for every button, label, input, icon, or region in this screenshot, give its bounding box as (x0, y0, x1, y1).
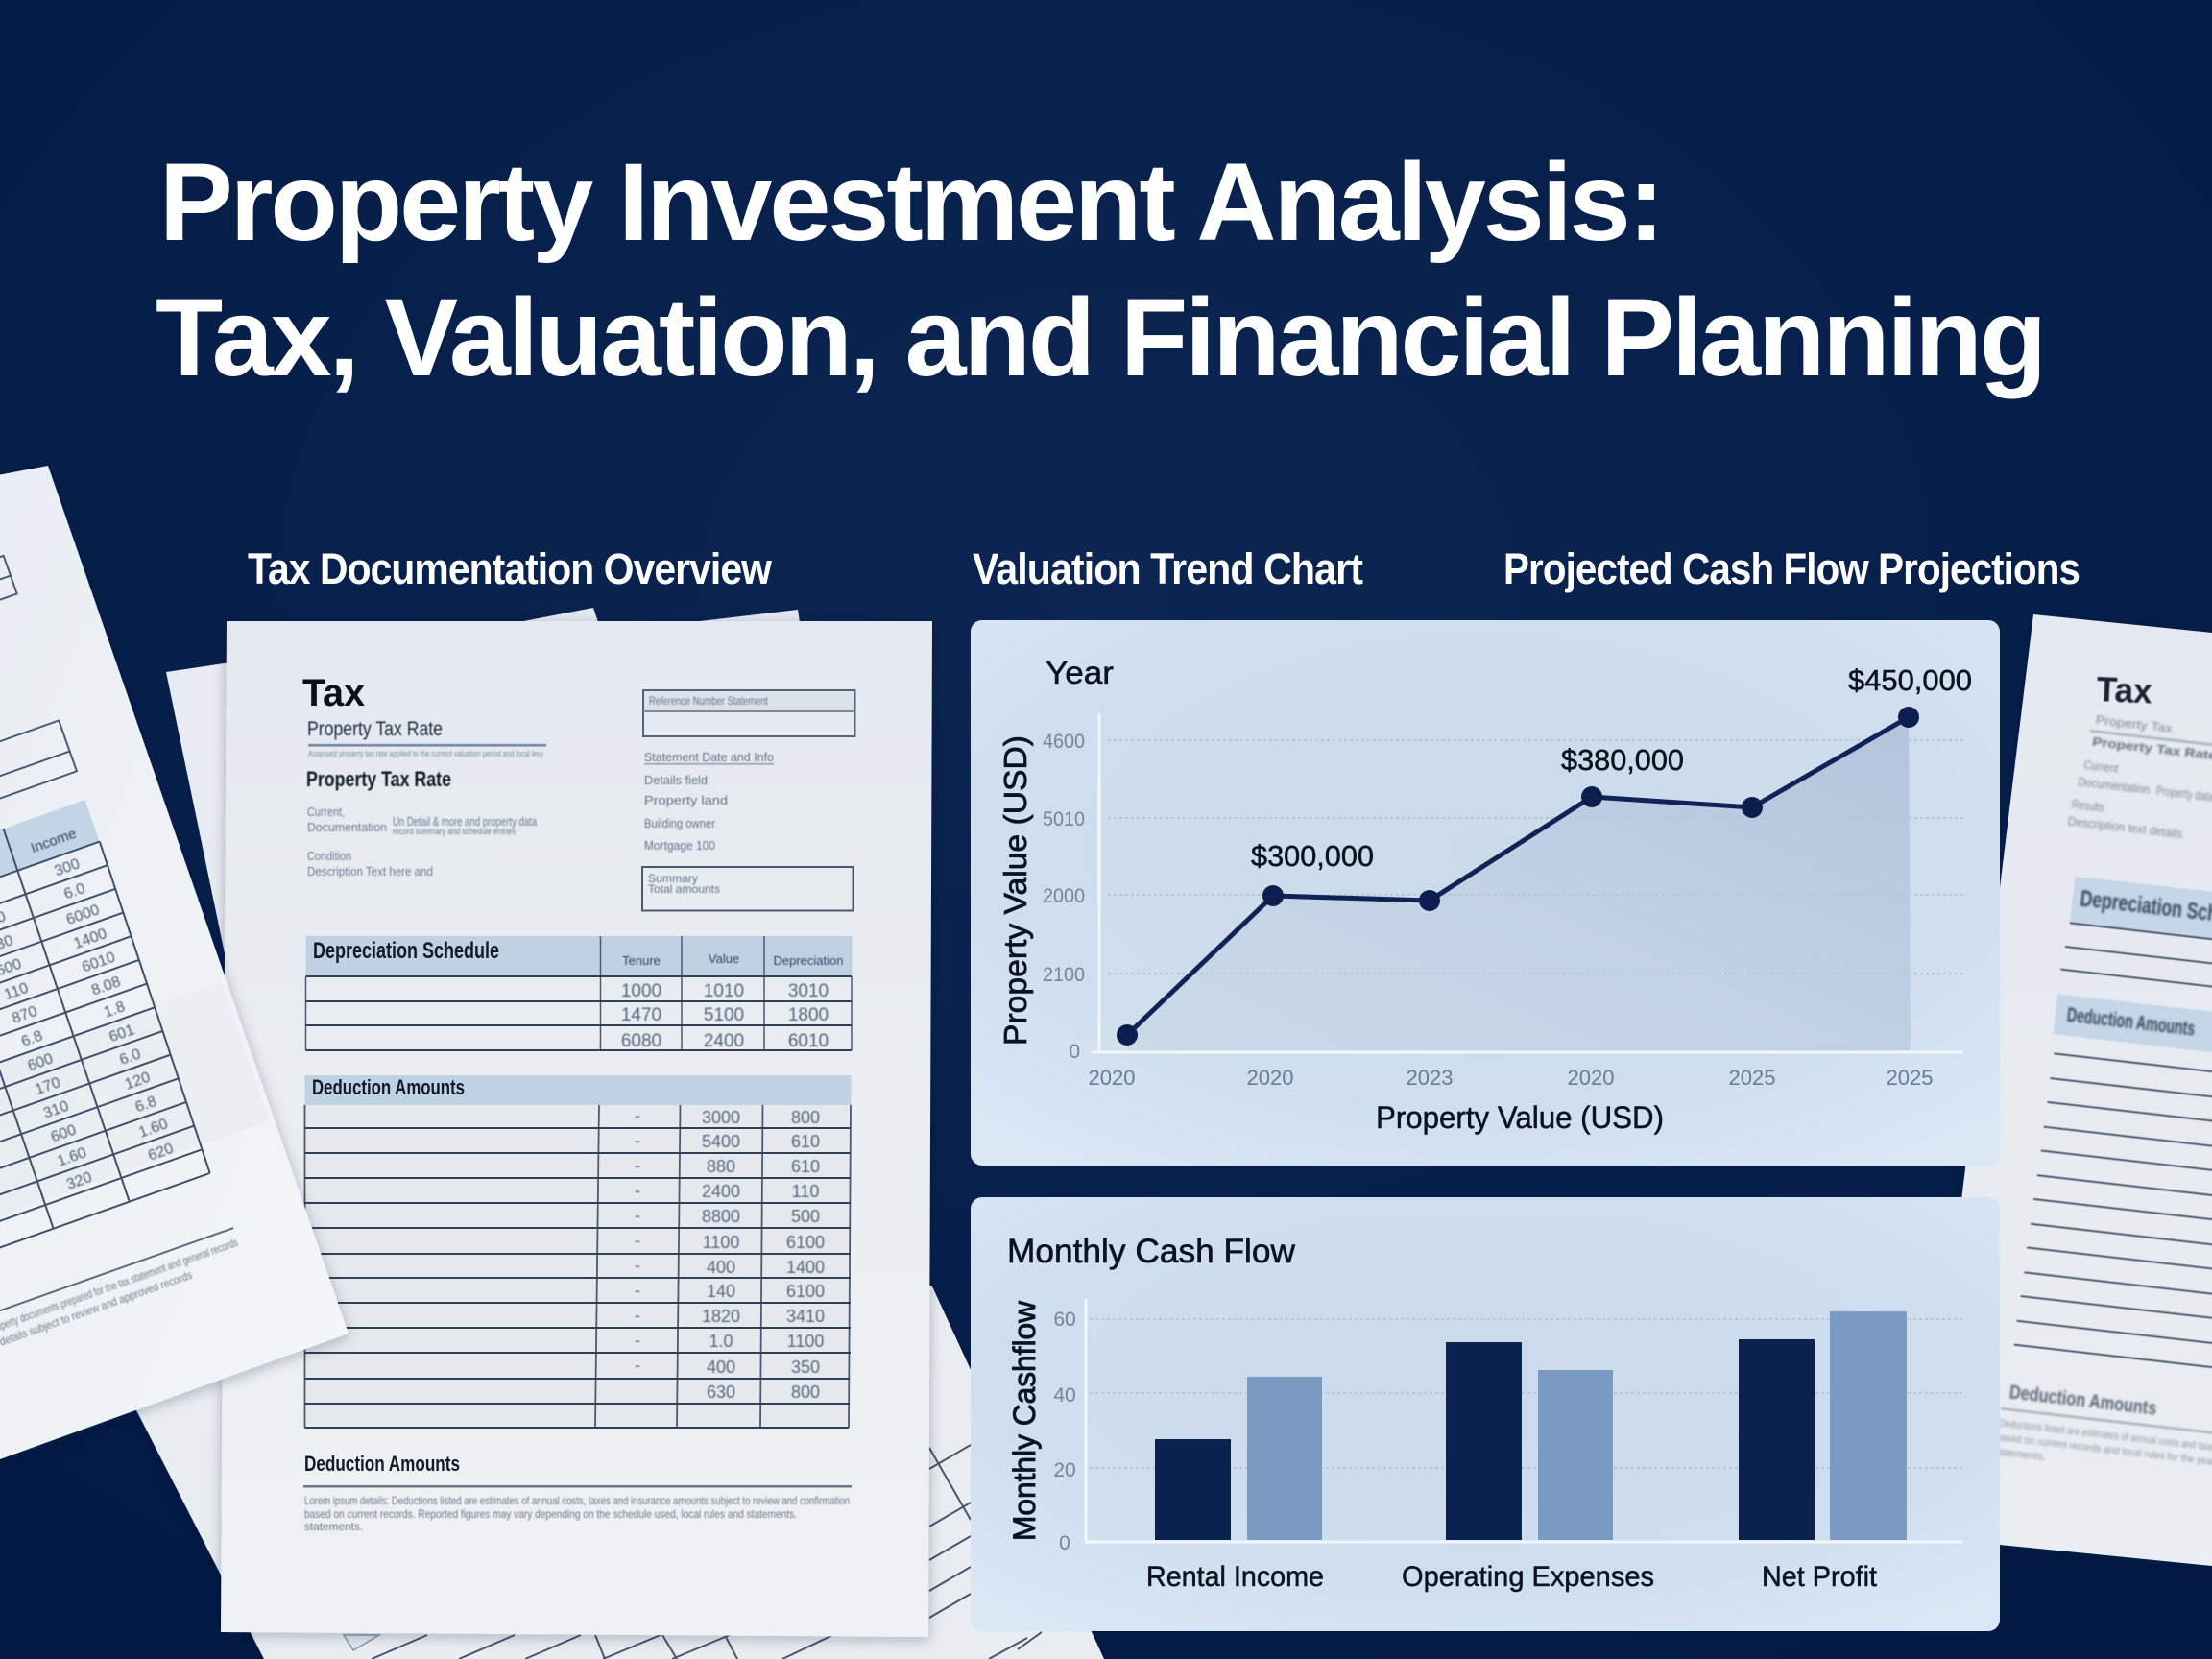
table: deduction amounts: - (635, 1131, 640, 1150)
table: deduction amounts: - (635, 1256, 640, 1275)
table: deduction amounts: 6100 (786, 1233, 825, 1252)
table: deduction amounts: - (635, 1356, 640, 1375)
right column details: Property land (644, 793, 728, 807)
y axis ticks: 0 (1069, 1041, 1080, 1063)
small text block: Property Tax (2095, 712, 2174, 735)
y axis ticks: 2000 (1043, 885, 1085, 907)
table: depreciation schedule: 6010 (788, 1031, 829, 1051)
table: deduction amounts: 6100 (786, 1282, 825, 1301)
table: deduction amounts: - (635, 1156, 640, 1175)
table: deduction amounts: Deduction Amounts (312, 1075, 465, 1099)
axes (1092, 713, 1963, 1052)
table: depreciation schedule: 2400 (704, 1031, 744, 1051)
category labels: Operating Expenses (1402, 1561, 1654, 1593)
right column details (644, 750, 774, 853)
small text block: Current (2083, 757, 2120, 776)
property tax rate text block: record summary and schedule entries (393, 827, 516, 836)
property tax rate text block: Current, (307, 805, 345, 819)
table values: 1400 (72, 926, 109, 952)
table: deduction amounts: 880 (707, 1157, 735, 1176)
title: Property Investment Analysis: (159, 141, 1662, 264)
right column details: Statement Date and Info (644, 750, 774, 764)
table: deduction amounts: 1100 (703, 1233, 739, 1252)
property tax rate text block: Un Detail & more and property data (393, 814, 538, 829)
table values: 120 (123, 1070, 153, 1094)
section headings (248, 544, 2080, 593)
property tax rate text block: Documentation (307, 820, 387, 834)
table: deduction amounts: 350 (791, 1358, 820, 1377)
x axis ticks: 2020 (1089, 1066, 1135, 1090)
footer: deduction amounts note (303, 1452, 852, 1533)
table: deduction amounts: 1.0 (709, 1332, 733, 1351)
small text block: Description text details (2067, 813, 2183, 841)
grid lines (1108, 740, 1963, 974)
table: deduction amounts: 1100 (787, 1332, 824, 1351)
x axis ticks (1089, 1066, 1933, 1090)
paper sheet (0, 466, 349, 1459)
table values: 6.0 (61, 880, 87, 902)
table values: 6.8 (133, 1094, 158, 1116)
panel background (971, 620, 2000, 1166)
y axis ticks: 60 (1053, 1309, 1076, 1331)
table values: 6.0 (117, 1046, 143, 1069)
table values: 6000 (64, 902, 102, 928)
table values: 1.60 (136, 1116, 170, 1142)
y axis ticks: 5010 (1043, 808, 1085, 830)
category labels: Net Profit (1762, 1561, 1878, 1593)
lower right form box: Summary (648, 872, 698, 885)
top right form box (643, 690, 854, 736)
chart title: Monthly Cash Flow (1007, 1233, 1296, 1270)
y axis ticks: 2100 (1043, 964, 1085, 986)
table: deduction amounts: - (635, 1306, 640, 1325)
table: deduction amounts: - (635, 1181, 640, 1200)
table values: 170 (33, 1074, 62, 1098)
table: depreciation schedule: 1470 (621, 1005, 661, 1025)
heading: Tax: Tax (2096, 669, 2153, 710)
property tax rate text block (306, 767, 538, 878)
table: deduction amounts: 140 (707, 1282, 735, 1301)
footer note: Deduction Amounts (2008, 1382, 2157, 1420)
right column details: Details field (644, 773, 708, 787)
table values: 870 (10, 1003, 39, 1027)
table values: 6.8 (19, 1028, 45, 1050)
y axis ticks (1053, 1309, 1076, 1554)
data points (1117, 707, 1919, 1046)
bottom back sheet of paper (96, 1104, 1104, 1659)
table: depreciation schedule: 5100 (704, 1005, 744, 1025)
footer: deduction amounts note: statements. (304, 1520, 363, 1533)
bars: operating expenses (1446, 1342, 1613, 1540)
footer: deduction amounts note: Lorem ipsum details: Deductions listed are estimates of annual costs, taxes and insurance amounts subject to review and confirmation (304, 1494, 850, 1507)
y axis title: Monthly Cashflow (1007, 1300, 1042, 1541)
y axis ticks (1043, 731, 1085, 1063)
table: deduction amounts: 500 (791, 1207, 820, 1226)
table: deduction amounts: 800 (791, 1108, 820, 1127)
table: deduction amounts: 610 (791, 1157, 820, 1176)
table values: 1.8 (102, 998, 128, 1022)
table: depreciation schedule (305, 936, 853, 1051)
footer: deduction amounts note: based on current records. Reported figures may vary depending on the schedule used, local rules and statements. (304, 1507, 797, 1521)
table: depreciation schedule: Value (709, 951, 739, 966)
footer rule and note (0, 1227, 233, 1331)
value callouts: $450,000 (1848, 663, 1972, 697)
property tax rate text block: Condition (307, 849, 351, 863)
panel: tilted document at right (1920, 614, 2212, 1566)
form boxes (0, 556, 80, 875)
table: deduction amounts: - (635, 1331, 640, 1350)
table: deduction amounts: 8800 (702, 1207, 740, 1226)
table: deduction amounts: 5400 (702, 1132, 740, 1151)
small text block: Documentation (2078, 774, 2151, 797)
footer: deduction amounts note: Deduction Amounts (304, 1452, 460, 1476)
top right form box: Reference Number Statement (649, 694, 769, 708)
right column details: Building owner (644, 816, 716, 830)
property tax rate text block: Description Text here and (307, 864, 433, 878)
tilted page contents (0, 535, 312, 1364)
table values: 1.60 (55, 1144, 89, 1170)
table: deduction amounts (2014, 994, 2212, 1370)
table values: 600 (49, 1121, 79, 1145)
table: deduction amounts: 610 (791, 1132, 820, 1151)
x axis ticks: 2020 (1247, 1066, 1293, 1090)
table: depreciation schedule (2060, 876, 2212, 995)
table: deduction amounts: 630 (707, 1382, 735, 1402)
table: deduction amounts: 1820 (702, 1307, 740, 1326)
table: depreciation schedule: 1000 (621, 981, 661, 1001)
small text block: Results (2071, 797, 2105, 815)
panel: valuation trend chart (971, 620, 2000, 1166)
x axis ticks: 2023 (1407, 1066, 1453, 1090)
table: deduction amounts: 3410 (786, 1307, 825, 1326)
section headings: Valuation Trend Chart (973, 544, 1363, 593)
footer note: statements. (1992, 1446, 2046, 1463)
table: deduction amounts: 110 (792, 1182, 819, 1201)
value callouts (1251, 663, 1972, 873)
panel background (971, 1197, 2000, 1631)
property tax rate text block: Property Tax Rate (306, 767, 451, 791)
table values: 601 (108, 1022, 136, 1046)
title (156, 141, 2044, 399)
label: Year: Year (1046, 655, 1114, 690)
x axis ticks: 2025 (1887, 1066, 1933, 1090)
tax rate sub-heading with rule: Property Tax Rate (307, 718, 443, 740)
table: deduction amounts: 400 (707, 1358, 735, 1377)
value callouts: $300,000 (1251, 839, 1374, 873)
table values: Income (29, 826, 79, 856)
heading: Tax: Tax (302, 672, 365, 714)
table: depreciation schedule: 1800 (788, 1005, 829, 1025)
small text block (2067, 710, 2212, 851)
table values: 310 (41, 1098, 71, 1122)
small text block: Property Tax Rate (2092, 734, 2212, 762)
title: Tax, Valuation, and Financial Planning (156, 276, 2044, 399)
table header (0, 800, 100, 944)
trend line (1127, 717, 1909, 1035)
table: deduction amounts: 400 (707, 1258, 735, 1277)
paper sheet (221, 621, 932, 1637)
section headings: Projected Cash Flow Projections (1503, 544, 2080, 593)
category labels (1146, 1561, 1878, 1593)
tilted page contents (1992, 663, 2212, 1483)
panel: tilted document at left (0, 466, 349, 1459)
tax rate sub-heading with rule: Assessed property tax rate applied to the current valuation period and local levy (308, 749, 543, 758)
table: deduction amounts (305, 1075, 851, 1428)
tax rate sub-heading with rule (307, 718, 546, 758)
table: depreciation schedule: Depreciation Schedule (313, 938, 499, 964)
table: deduction amounts: 2400 (702, 1182, 740, 1201)
x axis ticks: 2020 (1568, 1066, 1614, 1090)
area under line (1127, 717, 1911, 1052)
table values: 300 (53, 855, 82, 879)
table: depreciation schedule: Tenure (622, 953, 661, 968)
table values: 600 (26, 1050, 56, 1074)
grid lines (1090, 1319, 1963, 1468)
right column details: Mortgage 100 (644, 838, 715, 853)
table grid (0, 800, 216, 1273)
x axis title: Property Value (USD) (1376, 1100, 1664, 1135)
table: depreciation schedule: 3010 (788, 981, 829, 1001)
table values: 110 (2, 980, 31, 1003)
lower right form box: Total amounts (648, 882, 720, 896)
y axis ticks: 20 (1053, 1459, 1076, 1481)
table: deduction amounts: - (635, 1281, 640, 1300)
bars: rental income (1155, 1377, 1322, 1540)
table: deduction amounts: 3000 (702, 1108, 740, 1127)
panel: monthly cash flow chart (971, 1197, 2000, 1631)
table values: 6010 (80, 950, 118, 976)
table: deduction amounts: - (635, 1106, 640, 1125)
table values: 8.08 (89, 974, 123, 999)
back sheet tabs above the main page (518, 608, 800, 622)
table values (0, 826, 188, 1193)
value callouts: $380,000 (1561, 743, 1684, 777)
section headings: Tax Documentation Overview (248, 544, 773, 593)
y axis ticks: 40 (1053, 1384, 1076, 1407)
y axis ticks: 0 (1059, 1532, 1070, 1554)
back sheet left of the main page (166, 662, 230, 981)
y axis ticks: 4600 (1043, 731, 1085, 753)
table values: 620 (146, 1141, 176, 1165)
table: depreciation schedule: 6080 (621, 1031, 661, 1051)
axes (1085, 1299, 1963, 1542)
paper sheet (1920, 614, 2212, 1566)
table: deduction amounts: - (635, 1206, 640, 1225)
category labels: Rental Income (1146, 1561, 1324, 1593)
table: deduction amounts: 800 (791, 1382, 820, 1402)
table values: 320 (64, 1169, 94, 1193)
table: depreciation schedule: 1010 (704, 981, 744, 1001)
panel: main tax document (221, 621, 932, 1637)
y axis title: Property Value (USD) (998, 735, 1033, 1046)
table: depreciation schedule: Depreciation (774, 953, 843, 968)
bars: net profit (1739, 1311, 1907, 1540)
lower right form box (642, 867, 853, 910)
crease shading (0, 982, 270, 1245)
table: deduction amounts: 1400 (786, 1258, 825, 1277)
x axis ticks: 2025 (1729, 1066, 1775, 1090)
footer note (1992, 1381, 2212, 1483)
table: deduction amounts: - (635, 1231, 640, 1250)
